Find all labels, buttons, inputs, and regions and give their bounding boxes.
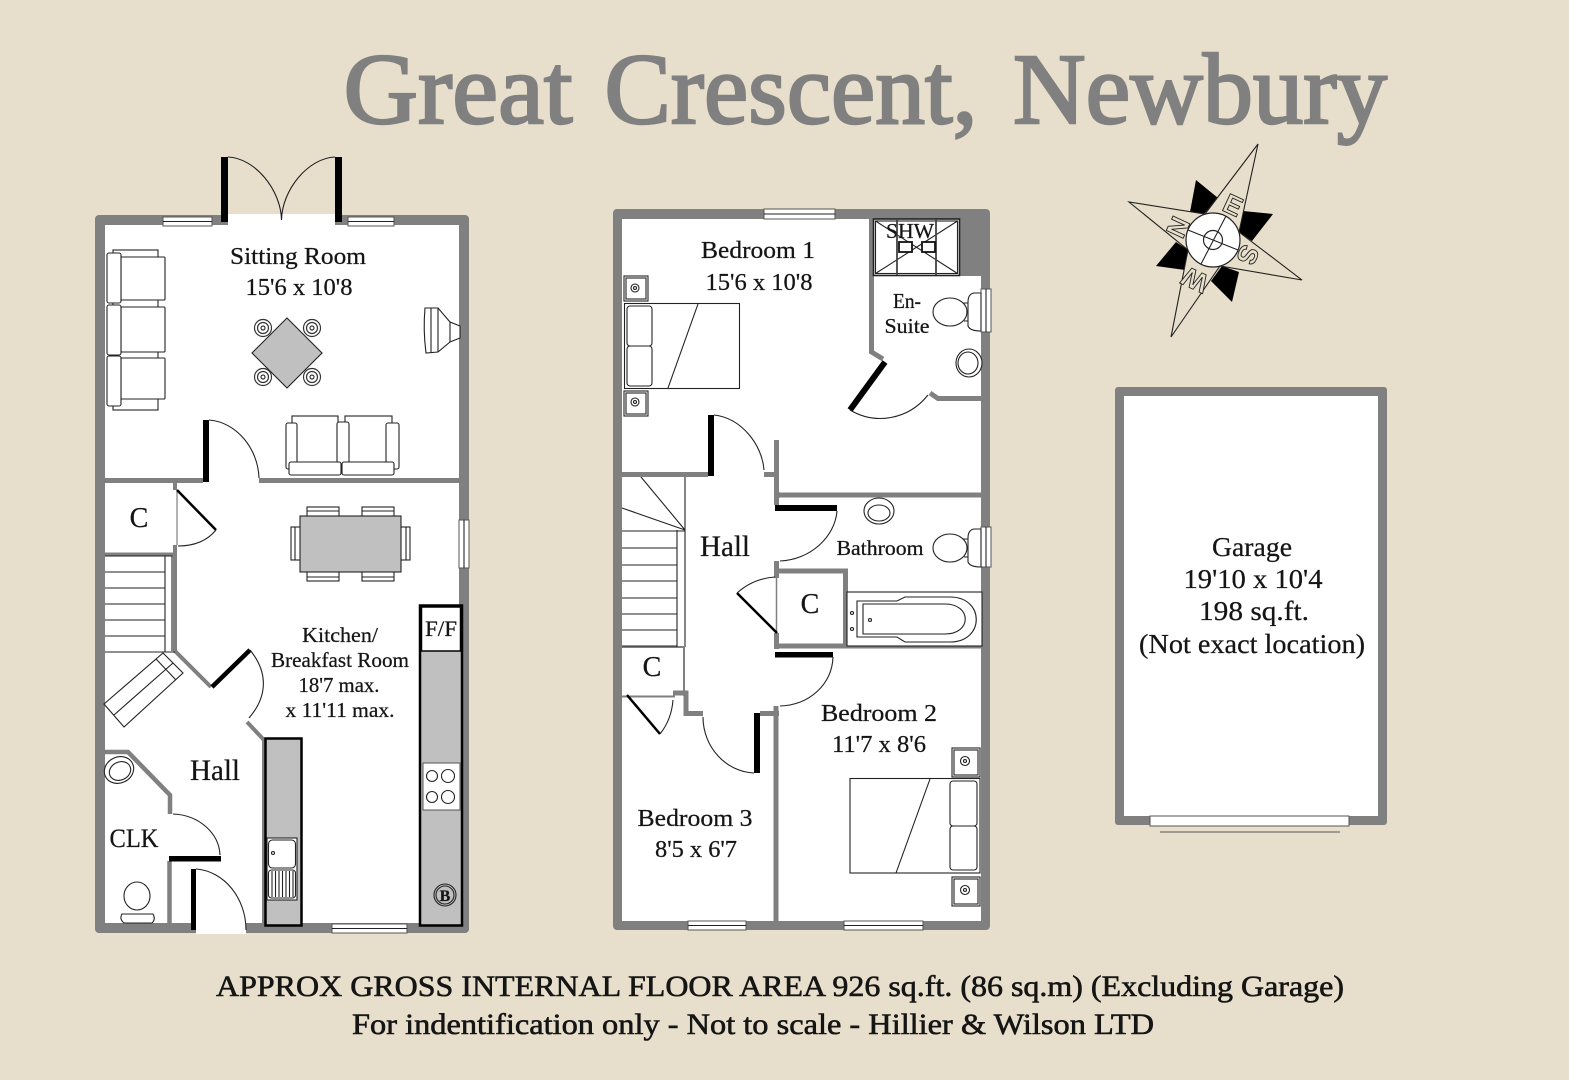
internal doors ground floor: [169, 420, 263, 930]
title: Great: [344, 33, 572, 145]
garage label: [1139, 532, 1365, 659]
shower cubicle: [874, 219, 960, 276]
room labels ground floor: 15'6 x 10'8: [246, 275, 352, 301]
room labels ground floor: Sitting Room: [230, 244, 366, 270]
footer text: [216, 970, 1344, 1041]
room labels ground floor: F/F: [425, 616, 457, 641]
room labels first floor: Bathroom: [836, 536, 924, 560]
kitchen right counter: [420, 606, 462, 926]
compass rose: W: [1177, 260, 1213, 299]
panel: garage: [1115, 387, 1387, 832]
dining table and chairs: [291, 507, 410, 581]
chaise / under stairs unit: [104, 653, 183, 727]
room labels first floor: Bedroom 2: [821, 701, 937, 727]
room labels ground floor: C: [130, 503, 148, 534]
bathroom basin: [864, 498, 894, 524]
windows first floor: [688, 209, 991, 930]
room labels ground floor: CLK: [110, 824, 159, 853]
first floor outer walls: [613, 209, 990, 930]
panel: first floor plan: [613, 209, 991, 930]
room labels ground floor: Hall: [190, 754, 240, 787]
room labels first floor: C: [801, 589, 819, 620]
bath tub: [847, 592, 982, 646]
cloakroom toilet: [121, 882, 154, 923]
room labels ground floor: x 11'11 max.: [286, 698, 394, 722]
boiler: [434, 884, 456, 906]
title: [344, 33, 1387, 145]
first floor internal walls: [620, 219, 981, 921]
hob: [423, 763, 460, 810]
garage label: (Not exact location): [1139, 629, 1365, 659]
boiler: B: [440, 888, 451, 905]
french doors: [221, 157, 342, 222]
compass rose: E: [1218, 188, 1247, 223]
stairs first floor: [622, 477, 685, 647]
room labels first floor: 8'5 x 6'7: [655, 837, 737, 863]
footer text: For indentification only - Not to scale - Hillier & Wilson LTD: [352, 1008, 1154, 1041]
room labels first floor: SHW: [886, 219, 934, 243]
room labels ground floor: 18'7 max.: [298, 673, 380, 697]
garage door: [1150, 816, 1349, 832]
compass rose: S: [1230, 240, 1265, 269]
room labels first floor: Bedroom 3: [638, 806, 752, 832]
compass rose: [1129, 144, 1302, 337]
room labels ground floor: Breakfast Room: [271, 648, 409, 672]
lamp / tv unit: [424, 308, 460, 353]
ground floor outer walls: [95, 214, 469, 934]
kitchen left counter with sink: [266, 738, 302, 926]
room labels first floor: Suite: [884, 314, 930, 338]
room labels first floor: Hall: [700, 530, 750, 563]
room labels first floor: 11'7 x 8'6: [832, 732, 926, 758]
room labels first floor: C: [643, 652, 661, 683]
windows ground floor: [163, 217, 469, 933]
ground floor internal walls: [105, 479, 459, 923]
bed: bedroom 2: [850, 748, 980, 906]
bathroom toilet: [933, 529, 981, 567]
panel: ground floor plan: [95, 157, 469, 934]
three seater sofa: [107, 250, 165, 410]
en-suite basin: [956, 349, 982, 377]
room labels first floor: 15'6 x 10'8: [706, 270, 812, 296]
garage label: Garage: [1212, 532, 1292, 562]
internal doors first floor: [627, 362, 928, 773]
cloakroom basin: [100, 752, 138, 788]
room labels first floor: [638, 219, 937, 863]
garage label: 198 sq.ft.: [1199, 596, 1309, 626]
title: Crescent,: [604, 33, 978, 145]
room labels first floor: Bedroom 1: [701, 238, 815, 264]
compass rose: N: [1161, 212, 1196, 242]
garage label: 19'10 x 10'4: [1184, 564, 1323, 594]
room labels ground floor: Kitchen/: [302, 623, 378, 647]
footer text: APPROX GROSS INTERNAL FLOOR AREA 926 sq.ft. (86 sq.m) (Excluding Garage): [216, 970, 1344, 1003]
coffee table with stools: [252, 318, 322, 388]
two seater sofa: [286, 416, 399, 475]
stairs ground floor: [105, 556, 175, 652]
title: Newbury: [1013, 33, 1387, 145]
room labels first floor: En-: [893, 289, 921, 313]
fridge freezer: [422, 607, 460, 651]
room labels ground floor: [110, 244, 457, 853]
en-suite toilet: [933, 293, 981, 331]
bed: bedroom 1: [624, 276, 740, 416]
